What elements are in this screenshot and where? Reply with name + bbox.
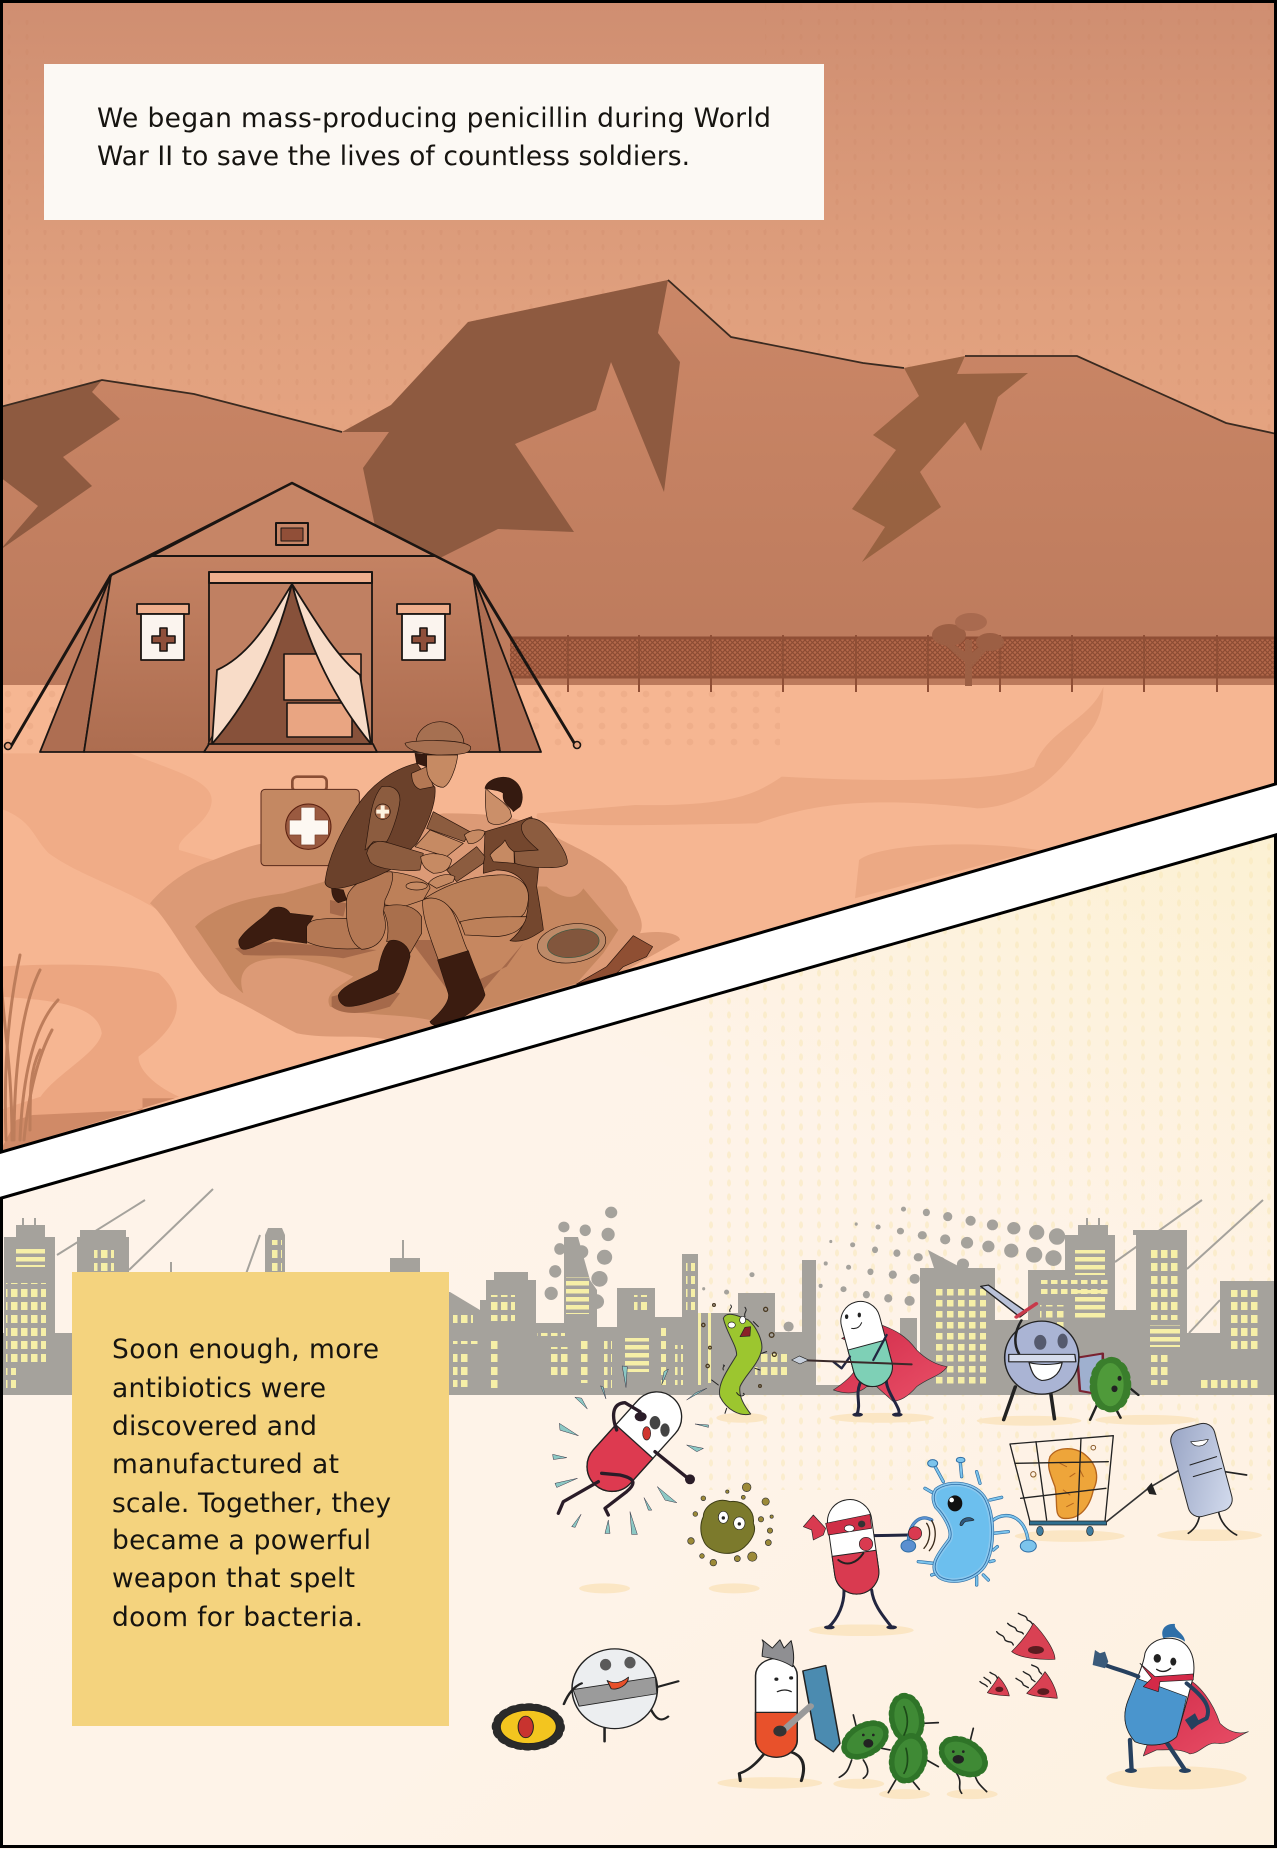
boy hands	[428, 840, 514, 888]
ground shadows	[579, 1413, 1262, 1799]
door frame	[209, 572, 372, 752]
chain-link fence	[510, 635, 1277, 692]
caption box: antibiotics: Soon enough, more	[112, 1334, 379, 1365]
door step	[204, 744, 377, 752]
red angry triangles	[980, 1613, 1057, 1698]
soldier shin	[307, 918, 360, 949]
boy hip	[460, 917, 527, 937]
soldier and wounded man	[239, 722, 653, 1026]
door flap left	[212, 584, 292, 744]
mountain shadow: centre	[342, 280, 680, 560]
soldier rear boot	[239, 907, 313, 949]
caption box: antibiotics: discovered and	[112, 1411, 317, 1442]
caption box: antibiotics: antibiotics were	[112, 1373, 326, 1404]
caption box: antibiotics: became a powerful	[112, 1525, 371, 1556]
rifle	[577, 936, 653, 984]
caption box: penicillin: War II to save the lives of countless soldiers.	[97, 141, 690, 172]
dropped helmet	[535, 919, 608, 967]
interior crates	[284, 654, 361, 737]
characters: right side	[803, 1421, 1248, 1793]
sky halftone dots	[0, 0, 1277, 690]
tent pegs	[4, 742, 580, 750]
brown virus	[688, 1483, 773, 1566]
city skyline	[0, 1218, 1277, 1395]
boy arm	[514, 819, 567, 868]
impact shards	[553, 1366, 708, 1534]
soldier front thigh	[382, 905, 422, 953]
guy ropes	[10, 575, 576, 748]
roof vent	[276, 523, 308, 545]
soldier hands	[406, 830, 485, 890]
yellow corner glow	[0, 830, 1277, 1395]
antenna beams	[57, 1189, 1263, 1333]
viking capsule with shield	[739, 1640, 840, 1781]
white disc with belt	[564, 1649, 678, 1741]
panel border: top	[2, 2, 1276, 1152]
cage cart with germ	[1010, 1436, 1185, 1536]
capsule spear knight	[792, 1297, 947, 1417]
caption box: antibiotics: weapon that spelt	[112, 1563, 355, 1594]
soldier torso	[325, 763, 435, 888]
halftone dots	[700, 830, 1277, 1490]
boy thigh	[423, 875, 528, 923]
skyline windows	[6, 1240, 1260, 1390]
cream background	[0, 830, 1277, 1849]
boy hair	[485, 777, 522, 812]
caption box: antibiotics: manufactured at	[112, 1449, 339, 1480]
caption box: antibiotics: doom for bacteria.	[112, 1602, 363, 1633]
panel: top war scene	[0, 0, 1277, 1165]
grass tuft	[0, 955, 58, 1140]
panel: bottom battle scene	[0, 830, 1277, 1849]
boy forearm	[447, 847, 485, 882]
helmet	[405, 722, 471, 755]
field tent	[4, 483, 580, 752]
shoulder badge	[375, 804, 390, 819]
boy boot	[430, 951, 485, 1026]
green germ squad	[842, 1697, 988, 1781]
germ legs	[839, 1715, 987, 1793]
caption box: antibiotics: scale. Together, they	[112, 1488, 391, 1519]
caption box: penicillin: We began mass-producing penicillin during World	[97, 103, 771, 134]
acacia tree	[932, 613, 1004, 686]
green worm bacterium	[702, 1304, 776, 1415]
soldier face	[427, 755, 458, 787]
shield knight body	[981, 1285, 1103, 1420]
boy shin	[423, 898, 468, 960]
door opening	[208, 584, 373, 744]
soldier upper sleeve	[365, 786, 400, 850]
boy face	[485, 788, 512, 824]
caption box: penicillin	[44, 64, 824, 220]
caption box: antibiotics	[72, 1272, 449, 1726]
blue bacterium	[901, 1457, 1036, 1585]
ninja red capsule	[803, 1497, 908, 1629]
soldier neck	[412, 767, 433, 789]
soldier far arm	[427, 812, 470, 842]
mountain range	[0, 280, 1277, 690]
soldier chest	[415, 830, 463, 857]
tent body	[84, 556, 500, 752]
soldier rear thigh	[346, 872, 393, 949]
right window	[397, 604, 450, 660]
ridge line	[0, 280, 1277, 434]
soldier hair	[415, 753, 440, 767]
tent side flaps	[40, 575, 111, 752]
mountain shadow: left	[0, 380, 120, 550]
blue-grey bar pill pulling cart	[1168, 1421, 1247, 1535]
germ faces	[862, 1707, 965, 1773]
smoke clouds	[524, 1207, 1065, 1332]
boy torso	[483, 817, 543, 941]
soldier centre	[385, 872, 430, 907]
yellow bacterium	[500, 1710, 556, 1744]
figure ground shadows	[150, 813, 680, 1040]
characters: round shield knight	[500, 1285, 1138, 1781]
door flap right	[292, 584, 371, 744]
panel border: bottom	[2, 835, 1276, 1846]
ground	[0, 685, 1277, 1165]
soldier near arm	[367, 841, 423, 871]
back hand	[332, 888, 347, 903]
tent roof	[152, 483, 435, 556]
left window	[137, 604, 189, 660]
ground halftone dots	[0, 685, 780, 747]
sky background	[3, 3, 1274, 432]
roof edges	[111, 483, 473, 575]
flying red capsule	[558, 1382, 695, 1515]
characters: upper row	[553, 1297, 947, 1566]
sand dunes	[0, 687, 1103, 1153]
soldier front boot	[338, 940, 410, 1006]
blue caped hero capsule	[1093, 1624, 1248, 1773]
first aid kit	[261, 777, 359, 866]
mountain shadow: right	[852, 356, 1028, 562]
green germ beside knight	[1090, 1363, 1138, 1420]
